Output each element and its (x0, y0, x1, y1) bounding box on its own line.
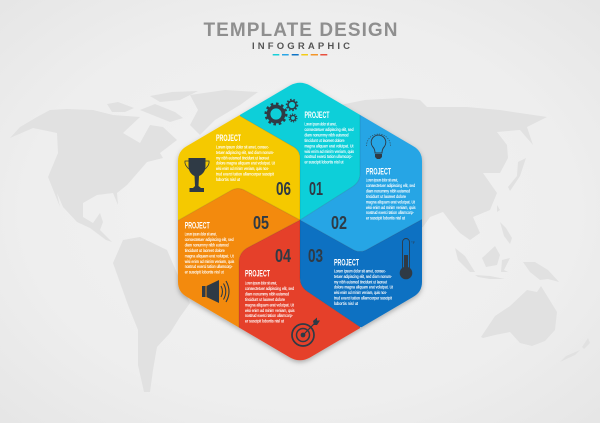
panel 03 text: Lorem ipsum dolor sit amet, consec- (334, 268, 386, 274)
segment 01 cyan (240, 70, 360, 220)
australia (481, 286, 557, 346)
title (204, 20, 398, 56)
icon: target (292, 318, 320, 346)
panel 02 text: diam nonummy nibh euismod (366, 188, 410, 194)
panel 04 text: wisi enim ad minim veniam, quis (245, 308, 295, 314)
panel 05 text: Lorem ipsum dolor sit amet, (185, 232, 217, 238)
segment 05 orange (176, 188, 300, 330)
panel 04 text: consectetuer adipiscing elit, sed (245, 286, 294, 292)
panel 04 text (245, 268, 295, 325)
panel 02 text: PROJECT (366, 166, 391, 176)
heading: TEMPLATE DESIGN (204, 20, 398, 41)
panel 01 text: PROJECT (304, 110, 330, 120)
new guinea (523, 262, 559, 282)
number 06: 06 (276, 178, 291, 199)
panel 01 text: nostrud exerci tation ullamcorp- (304, 154, 353, 160)
southeast asia islands (455, 205, 512, 279)
panel 03 text (334, 258, 393, 307)
panel 01 text: consectetuer adipiscing elit, sed (304, 127, 354, 133)
number 03: 03 (308, 245, 323, 266)
panel 01 text: tincidunt ut laoreet dolore (304, 138, 345, 144)
panel 05 text: consectetuer adipiscing elit, sed (185, 237, 234, 243)
panel 03 text: dolore magna aliquam erat volutpat. Ut (334, 285, 393, 291)
panel 02 text: consectetuer adipiscing elit, sed (366, 183, 415, 189)
panel 02 text (366, 166, 416, 222)
panel 01 text: wisi enim ad minim veniam, quis (304, 149, 354, 155)
panel 01 text (304, 110, 354, 166)
panel 06 text: trud exerci tation ullamcorper suscipit (216, 172, 274, 178)
japan (508, 158, 526, 191)
panel 04 text: magna aliquam erat volutpat. Ut (245, 302, 294, 308)
segment 03 dark blue (300, 220, 424, 331)
panel 01 text: diam nonummy nibh euismod (304, 132, 349, 138)
panel 02 text: er suscipit lobortis nisl ut (366, 216, 405, 222)
panel 03 text: wisi enim ad minim veniam, quis nos- (334, 290, 387, 296)
icon: thermometer: °F (411, 240, 416, 245)
arctic islands (107, 91, 198, 122)
panel 06 text: lobortis nisl ut (216, 177, 241, 183)
icon: light bulb (366, 134, 390, 159)
panel 03 text: my nibh euismod tincidunt ut laoreet (334, 279, 387, 285)
icon: speaker (202, 280, 229, 303)
panel 01 text: magna aliquam erat volutpat. Ut (304, 143, 354, 149)
panel 02 text: wisi enim ad minim veniam, quis (366, 205, 416, 211)
panel 04 text: Lorem ipsum dolor sit amet, (245, 280, 277, 286)
segment 02 light blue (300, 114, 424, 252)
panel 04 text: nostrud exerci tation ullamcorp- (245, 313, 293, 319)
icon: thermometer (400, 239, 416, 279)
panel 05 text: wisi enim ad minim veniam, quis (185, 259, 235, 265)
panel 03 text: lobortis nisl ut (334, 301, 359, 307)
panel 06 text: wisi enim ad minim veniam, quis nos- (216, 166, 269, 172)
panel 01 text: Lorem ipsum dolor sit amet, (304, 122, 336, 128)
panel 04 text: tincidunt ut laoreet dolore (245, 297, 285, 303)
south america (113, 237, 190, 392)
panel 06 text: tetuer adipiscing elit, sed diam nonum- (216, 150, 274, 156)
hexagon (170, 70, 430, 370)
panel 02 text: nostrud exerci tation ullamcorp- (366, 210, 414, 216)
panel 06 text: Lorem ipsum dolor sit amet, consec- (216, 144, 269, 150)
number 02: 02 (331, 212, 347, 233)
panel 05 text: magna aliquam erat volutpat. Ut (185, 253, 234, 259)
number 05: 05 (253, 212, 269, 233)
segment 06 yellow (176, 114, 300, 222)
colored dashes (273, 54, 327, 56)
panel 05 text: tincidunt ut laoreet dolore (185, 248, 225, 254)
panel 05 text (185, 220, 235, 276)
subheading: INFOGRAPHIC (252, 41, 350, 52)
panel 06 text: my nibh euismod tincidunt ut laoreet (216, 155, 269, 161)
panel 05 text: PROJECT (185, 220, 210, 230)
panel 06 text: PROJECT (216, 133, 241, 143)
panel 04 text: PROJECT (245, 268, 270, 278)
north america (10, 109, 177, 242)
panel 02 text: tincidunt ut laoreet dolore (366, 194, 406, 200)
panel 05 text: nostrud exerci tation ullamcorp- (185, 264, 233, 270)
number 04: 04 (275, 245, 292, 266)
panel 05 text: diam nonummy nibh euismod (185, 242, 229, 248)
panel 03 text: tetuer adipiscing elit, sed diam nonum- (334, 274, 392, 280)
new zealand (560, 338, 590, 362)
icon: trophy (185, 158, 209, 192)
number 01: 01 (309, 178, 323, 199)
panel 03 text: trud exerci tation ullamcorper suscipit (334, 296, 392, 302)
panel 01 text: er suscipit lobortis nisl ut (304, 160, 344, 166)
panel 02 text: Lorem ipsum dolor sit amet, (366, 178, 398, 184)
world map (10, 90, 590, 392)
panel 06 text (216, 133, 275, 183)
panel 04 text: diam nonummy nibh euismod (245, 291, 289, 297)
panel 04 text: er suscipit lobortis nisl ut (245, 319, 284, 325)
panel 03 text: PROJECT (334, 258, 359, 268)
panel 05 text: er suscipit lobortis nisl ut (185, 270, 224, 276)
panel 06 text: dolore magna aliquam erat volutpat. Ut (216, 161, 275, 167)
icon: gears (266, 100, 298, 124)
greenland (190, 90, 258, 135)
panel 02 text: magna aliquam erat volutpat. Ut (366, 199, 415, 205)
eurasia (300, 98, 547, 240)
segment 04 red (239, 220, 360, 370)
